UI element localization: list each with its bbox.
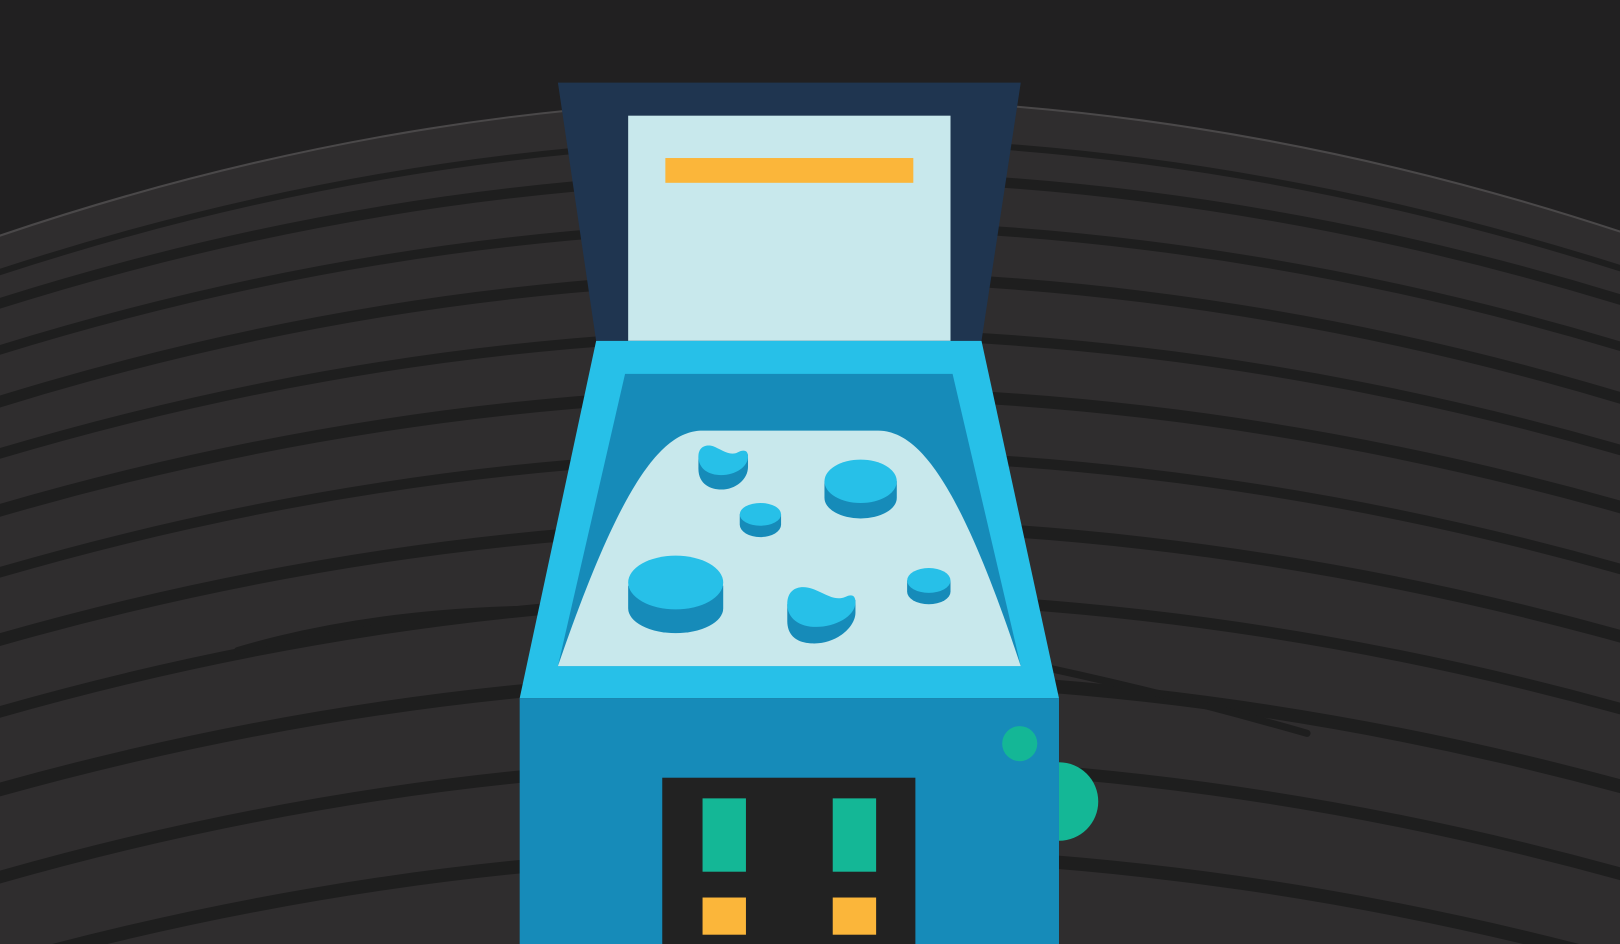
bumper: small: [740, 503, 781, 537]
bumper: blob bottom: [787, 587, 855, 643]
cabinet base: [520, 698, 1098, 944]
screen: [628, 116, 951, 341]
bumper: right: [824, 460, 897, 518]
bumper: blob top: [698, 445, 748, 490]
playfield: [520, 341, 1059, 698]
backbox: [558, 83, 1021, 341]
score bar: [665, 158, 913, 183]
bumper: large: [628, 556, 723, 633]
control panel: [662, 778, 915, 944]
bumper: small right: [907, 568, 951, 604]
start light: [1002, 726, 1037, 761]
side button: [1059, 762, 1098, 841]
